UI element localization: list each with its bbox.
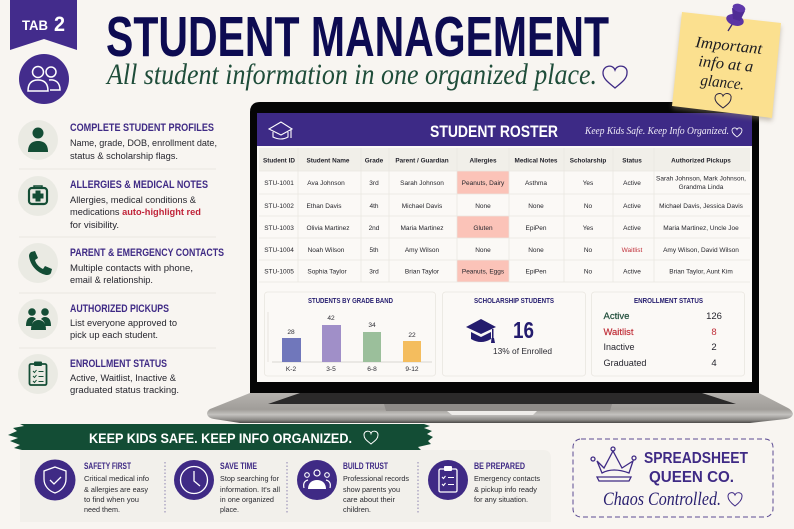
roster table: STU-1005 bbox=[264, 268, 294, 276]
feature: complete student profiles: Name, grade, DOB, enrollment date, bbox=[70, 138, 217, 149]
sticky note bbox=[672, 2, 781, 121]
logo badge: QUEEN CO. bbox=[649, 469, 734, 486]
logo badge: Chaos Controlled. bbox=[603, 489, 721, 510]
bar: K-2: 28 bbox=[287, 329, 295, 336]
roster table: Brian Taylor bbox=[405, 268, 440, 276]
green banner: KEEP KIDS SAFE. KEEP INFO ORGANIZED. bbox=[89, 430, 352, 446]
panel: enrollment status: 126 bbox=[706, 311, 722, 322]
roster table: EpiPen bbox=[526, 225, 547, 232]
roster table: Parent / Guardian bbox=[395, 158, 449, 164]
roster table: Sarah Johnson, Mark Johnson, bbox=[656, 176, 746, 182]
roster table: Maria Martinez, Uncle Joe bbox=[663, 225, 739, 232]
laptop base bbox=[207, 393, 793, 423]
roster table: 5th bbox=[369, 247, 379, 254]
card: be prepared: for any situation. bbox=[474, 495, 528, 504]
roster table: STU-1003 bbox=[264, 225, 294, 232]
card: safety first: SAFETY FIRST bbox=[84, 460, 131, 471]
tab ribbon: TAB bbox=[22, 17, 48, 33]
bar: K-2 bbox=[282, 329, 301, 373]
card: save time bbox=[174, 460, 280, 514]
panel: enrollment status: Graduated bbox=[604, 358, 646, 369]
roster table: Student Name bbox=[307, 158, 350, 164]
card: be prepared: Emergency contacts bbox=[474, 474, 540, 483]
roster table: Scholarship bbox=[570, 158, 606, 164]
roster table: None bbox=[475, 247, 491, 254]
card: build trust: Professional records bbox=[343, 474, 409, 483]
panel: scholarship students: 13% of Enrolled bbox=[493, 346, 552, 356]
feature: complete student profiles: COMPLETE STUDENT PROFILES bbox=[70, 122, 214, 134]
roster table: Noah Wilson bbox=[308, 247, 345, 254]
roster table: Gluten bbox=[473, 225, 493, 232]
roster table: Yes bbox=[583, 180, 594, 187]
panel: enrollment status: Active bbox=[604, 311, 630, 322]
screen bezel bbox=[250, 102, 759, 393]
roster table: Waitlist bbox=[622, 247, 643, 254]
roster table: Maria Martinez bbox=[401, 225, 443, 232]
roster table: Allergies bbox=[470, 158, 497, 164]
roster tagline: Keep Kids Safe. Keep Info Organized. bbox=[584, 125, 729, 137]
subtitle: All student information in one organized place. bbox=[105, 58, 597, 91]
roster table: Peanuts, Dairy bbox=[462, 180, 505, 187]
roster table bbox=[259, 148, 750, 282]
roster table: EpiPen bbox=[526, 268, 547, 276]
roster table: Medical Notes bbox=[515, 158, 558, 164]
tab ribbon: 2 bbox=[54, 13, 65, 36]
panel: scholarship students: 16 bbox=[513, 317, 534, 343]
roster table: Active bbox=[623, 180, 641, 187]
roster table: Peanuts, Eggs bbox=[462, 268, 505, 276]
feature: complete student profiles: status & scholarship flags. bbox=[70, 151, 178, 162]
icon: tagline heart bbox=[732, 128, 742, 137]
roster table: No bbox=[584, 247, 593, 254]
roster header bar bbox=[257, 113, 752, 146]
bar: 3-5: 3-5 bbox=[326, 366, 336, 373]
bar: 9-12: 9-12 bbox=[405, 366, 419, 373]
roster table: Ethan Davis bbox=[306, 203, 342, 210]
icon: people bbox=[297, 460, 337, 500]
bar: 3-5: 42 bbox=[327, 315, 335, 322]
card: build trust: care about their bbox=[343, 495, 395, 504]
sticky note: Important bbox=[694, 34, 764, 58]
feature: complete student profiles bbox=[18, 120, 217, 162]
panel: scholarship students: SCHOLARSHIP STUDENTS bbox=[474, 296, 554, 305]
card: save time: Stop searching for bbox=[220, 474, 279, 483]
trackpad bbox=[384, 404, 612, 411]
trackpad notch bbox=[447, 411, 537, 415]
feature: allergies and medical notes: for visibility. bbox=[70, 220, 119, 231]
card: build trust: BUILD TRUST bbox=[343, 460, 388, 471]
roster table: Yes bbox=[583, 225, 594, 232]
feature: parent and emergency contacts: email & relationship. bbox=[70, 275, 153, 286]
footer cards panel bbox=[20, 450, 551, 522]
tab ribbon bbox=[10, 0, 77, 50]
icon: clock bbox=[174, 460, 214, 500]
feature list bbox=[18, 120, 224, 396]
card: safety first: & allergies are easy bbox=[84, 485, 148, 494]
card: save time: place. bbox=[220, 505, 239, 514]
feature: allergies and medical notes bbox=[18, 176, 208, 231]
sticky note: glance. bbox=[700, 72, 745, 94]
roster table: Student ID bbox=[263, 158, 295, 164]
roster table: Michael Davis bbox=[402, 203, 443, 210]
icon: banner heart bbox=[364, 431, 378, 444]
roster table: 3rd bbox=[369, 268, 379, 276]
card: be prepared: BE PREPARED bbox=[474, 460, 525, 471]
icon: subtitle heart bbox=[603, 66, 627, 88]
roster table: STU-1001 bbox=[264, 180, 294, 187]
feature: allergies and medical notes: ALLERGIES & MEDICAL NOTES bbox=[70, 179, 208, 191]
roster table: Sarah Johnson bbox=[400, 180, 444, 187]
bar: 6-8: 6-8 bbox=[367, 366, 377, 373]
feature: allergies and medical notes: medications auto-highlight red bbox=[70, 207, 201, 218]
roster table: Sophia Taylor bbox=[307, 268, 347, 276]
panel: students by grade band bbox=[264, 292, 436, 376]
icon: push pin bbox=[725, 2, 746, 31]
icon: person bbox=[18, 120, 58, 160]
icon: logo heart bbox=[728, 493, 742, 506]
icon: people circle bbox=[19, 54, 69, 104]
feature: authorized pickups bbox=[18, 299, 177, 341]
card: build trust: children. bbox=[343, 505, 371, 514]
card: save time: in one organized bbox=[220, 495, 274, 504]
panel: enrollment status: 4 bbox=[711, 358, 717, 369]
roster table: 2nd bbox=[369, 225, 380, 232]
icon: graduation cap outline bbox=[269, 122, 292, 139]
roster table: Active bbox=[623, 268, 641, 276]
roster table: None bbox=[528, 203, 544, 210]
roster table: Active bbox=[623, 203, 641, 210]
feature: allergies and medical notes: Allergies, medical conditions & bbox=[70, 195, 197, 206]
feature: parent and emergency contacts bbox=[18, 243, 224, 286]
card: safety first: to find when you bbox=[84, 495, 139, 504]
card: build trust bbox=[297, 460, 409, 514]
feature: authorized pickups: List everyone approved to bbox=[70, 318, 177, 329]
roster table: STU-1004 bbox=[264, 247, 294, 254]
logo badge: SPREADSHEET bbox=[644, 450, 748, 467]
card: save time: SAVE TIME bbox=[220, 460, 257, 471]
panel: enrollment status: 2 bbox=[711, 342, 717, 353]
roster table: No bbox=[584, 268, 593, 276]
icon: checklist bbox=[428, 460, 468, 500]
roster table: Asthma bbox=[525, 180, 547, 187]
feature: enrollment status bbox=[18, 354, 179, 396]
icon: shield bbox=[34, 460, 76, 500]
icon: group bbox=[18, 299, 58, 339]
panel: students by grade band: STUDENTS BY GRADE BAND bbox=[308, 296, 394, 305]
card: save time: information. It's all bbox=[220, 485, 280, 494]
roster table: Grade bbox=[365, 158, 384, 164]
feature: enrollment status: graduated status tracking. bbox=[70, 385, 179, 396]
bar: 9-12: 22 bbox=[408, 332, 416, 339]
panel: enrollment status: Inactive bbox=[604, 342, 634, 353]
roster table: Status bbox=[622, 158, 642, 164]
panel: enrollment status: 8 bbox=[711, 327, 717, 338]
card: build trust: show parents you bbox=[343, 485, 400, 494]
roster table: Authorized Pickups bbox=[671, 158, 731, 164]
title: STUDENT MANAGEMENT bbox=[106, 5, 609, 69]
panel: enrollment status: Waitlist bbox=[604, 327, 634, 338]
panel: enrollment status bbox=[592, 292, 744, 376]
card: safety first: Critical medical info bbox=[84, 474, 149, 483]
laptop bbox=[207, 102, 793, 423]
feature: authorized pickups: pick up each student. bbox=[70, 330, 158, 341]
card: be prepared bbox=[428, 460, 540, 504]
bar: 6-8 bbox=[363, 322, 381, 373]
roster table: Grandma Linda bbox=[679, 184, 724, 191]
roster table: 4th bbox=[369, 203, 379, 210]
card: be prepared: & pickup info ready bbox=[474, 485, 537, 494]
screen bbox=[257, 113, 752, 382]
roster table: 3rd bbox=[369, 180, 379, 187]
roster table: None bbox=[475, 203, 491, 210]
roster table: Brian Taylor, Aunt Kim bbox=[669, 268, 733, 276]
icon: note heart bbox=[715, 94, 731, 108]
card: safety first bbox=[34, 460, 149, 514]
roster table: Amy Wilson bbox=[405, 247, 440, 254]
roster table: Olivia Martinez bbox=[307, 225, 349, 232]
icon: crown bbox=[591, 447, 636, 481]
keyboard bbox=[268, 393, 736, 404]
feature: parent and emergency contacts: PARENT & EMERGENCY CONTACTS bbox=[70, 247, 224, 259]
icon: graduation cap bbox=[466, 319, 496, 343]
roster table: STU-1002 bbox=[264, 203, 294, 210]
bar: 6-8: 34 bbox=[368, 322, 376, 329]
card: safety first: need them. bbox=[84, 505, 120, 514]
roster title: STUDENT ROSTER bbox=[430, 122, 558, 141]
bar: 3-5 bbox=[322, 315, 341, 373]
roster table: No bbox=[584, 203, 593, 210]
roster table: Active bbox=[623, 225, 641, 232]
feature: enrollment status: ENROLLMENT STATUS bbox=[70, 358, 167, 370]
panel: enrollment status: ENROLLMENT STATUS bbox=[634, 296, 703, 305]
icon: medical kit bbox=[18, 176, 58, 216]
bar: K-2: K-2 bbox=[286, 366, 296, 373]
feature: enrollment status: Active, Waitlist, Inactive & bbox=[70, 373, 177, 384]
bar: 9-12 bbox=[403, 332, 421, 373]
roster table: None bbox=[528, 247, 544, 254]
roster table: Ava Johnson bbox=[307, 180, 345, 187]
feature: authorized pickups: AUTHORIZED PICKUPS bbox=[70, 303, 169, 315]
roster table: Amy Wilson, David Wilson bbox=[663, 247, 739, 254]
panel: scholarship students bbox=[442, 292, 586, 376]
icon: clipboard bbox=[18, 354, 58, 394]
roster table: Michael Davis, Jessica Davis bbox=[659, 203, 744, 210]
logo badge bbox=[573, 439, 773, 517]
icon: phone bbox=[18, 243, 58, 283]
green banner bbox=[8, 424, 433, 450]
feature: parent and emergency contacts: Multiple contacts with phone, bbox=[70, 263, 193, 274]
sticky note: info at a bbox=[698, 53, 754, 76]
